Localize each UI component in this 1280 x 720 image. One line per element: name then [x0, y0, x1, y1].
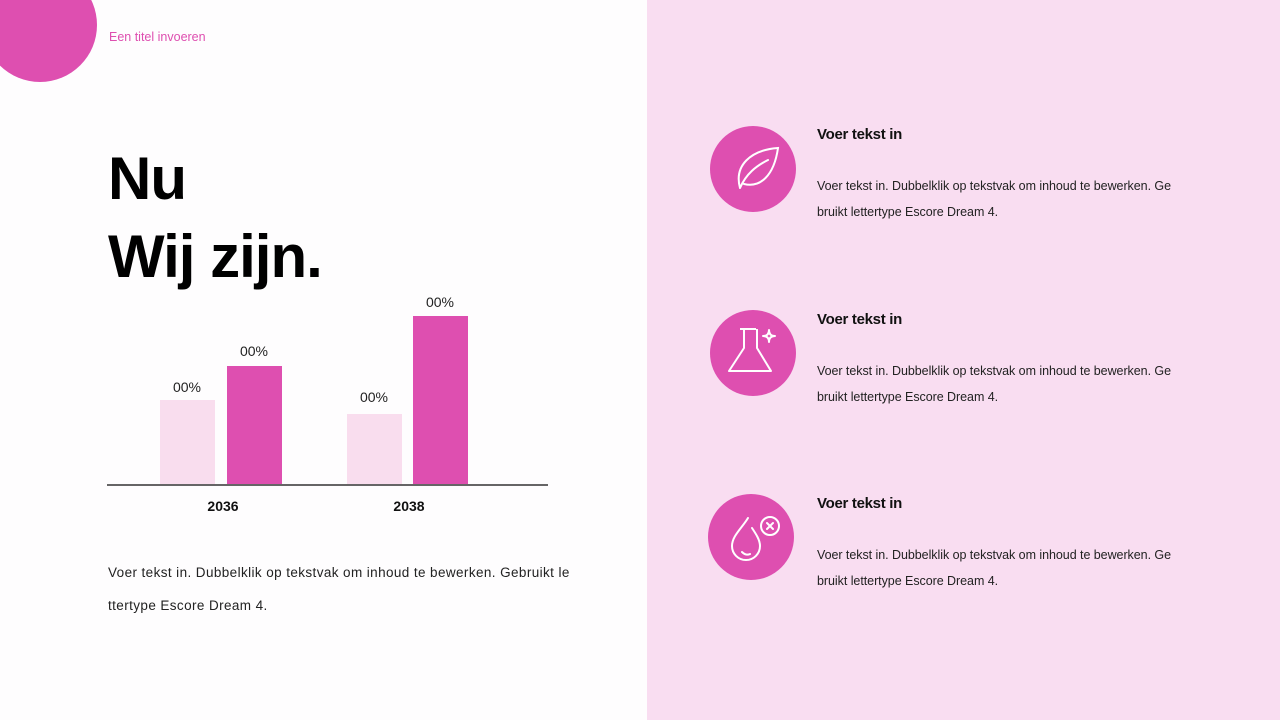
- subtitle: Een titel invoeren: [109, 30, 206, 44]
- icon: leaf: [710, 126, 796, 212]
- title: Wij zijn.: [108, 223, 322, 290]
- left body text: Voer tekst in. Dubbelklik op tekstvak om inhoud te bewerken. Gebruikt le ttertype Escore Dream 4.: [108, 565, 570, 613]
- title: [108, 145, 322, 290]
- bar chart: 00%: [240, 343, 268, 359]
- item 3: [817, 495, 1171, 588]
- item 2: Voer tekst in. Dubbelklik op tekstvak om inhoud te bewerken. Ge bruikt lettertype Escore Dream 4.: [817, 364, 1171, 404]
- item 1: Voer tekst in. Dubbelklik op tekstvak om inhoud te bewerken. Ge bruikt lettertype Escore Dream 4.: [817, 179, 1171, 219]
- bar chart: 2036: [207, 498, 239, 514]
- bar chart: 2038: [393, 498, 425, 514]
- icon: drop: [708, 494, 794, 580]
- icon: flask: [710, 310, 796, 396]
- item 3: Voer tekst in: [817, 495, 902, 512]
- decorative circle: [0, 0, 97, 82]
- item 2: Voer tekst in: [817, 311, 902, 328]
- item 1: [817, 126, 1171, 219]
- bar chart: 00%: [173, 379, 201, 395]
- bar chart: 00%: [360, 389, 388, 405]
- item 1: Voer tekst in: [817, 126, 902, 143]
- item 2: [817, 311, 1171, 404]
- item 3: Voer tekst in. Dubbelklik op tekstvak om inhoud te bewerken. Ge bruikt lettertype Escore Dream 4.: [817, 548, 1171, 588]
- bar chart: [107, 294, 548, 514]
- title: Nu: [108, 145, 186, 212]
- panel: right background: [647, 0, 1280, 720]
- bar chart: 00%: [426, 294, 454, 310]
